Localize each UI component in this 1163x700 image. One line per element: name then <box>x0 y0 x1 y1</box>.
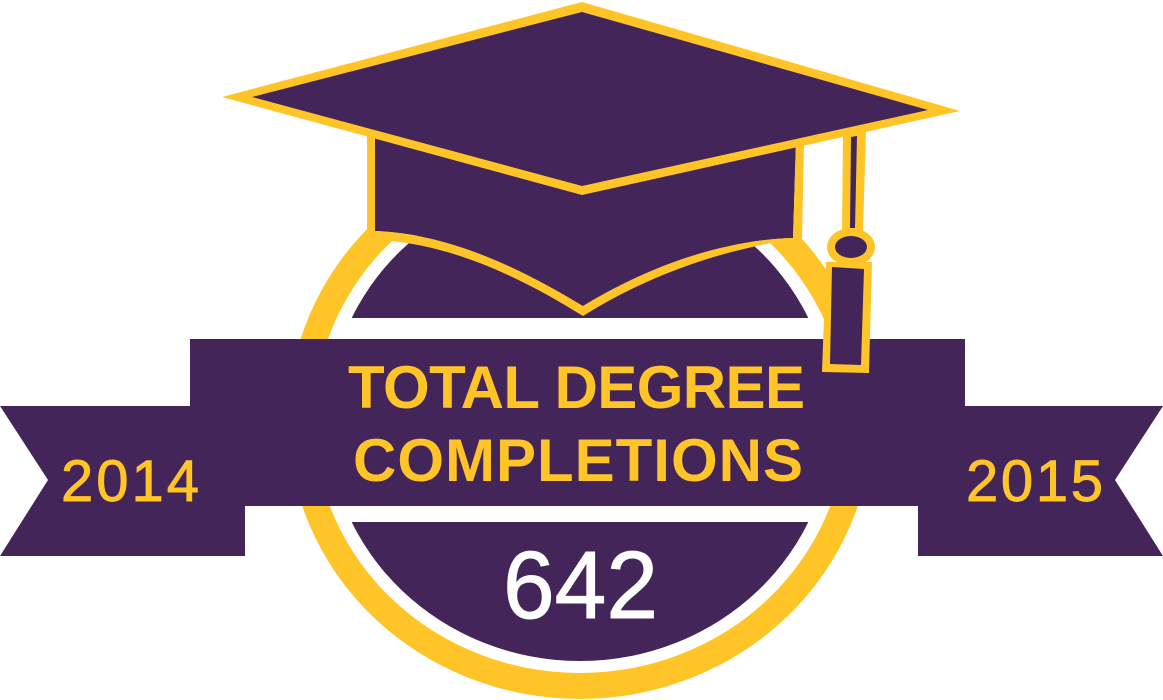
ribbon left tail <box>0 406 245 556</box>
tassel fringe <box>822 262 872 373</box>
lower purple circle segment <box>352 522 808 661</box>
total number: 642: 642 <box>503 532 658 639</box>
ribbon banner <box>0 339 1163 556</box>
year: 2014: 2014 <box>61 449 199 514</box>
gold ring around the badge <box>288 141 872 699</box>
heading: completions: COMPLETIONS <box>353 427 803 494</box>
tassel knot <box>827 228 875 266</box>
cap band gold outline <box>367 128 804 316</box>
ribbon centre band <box>190 339 965 506</box>
ribbon right tail <box>918 406 1163 556</box>
upper purple circle segment <box>352 236 808 318</box>
tassel <box>822 130 875 373</box>
year: 2015: 2015 <box>966 449 1103 514</box>
graduation cap <box>222 2 960 373</box>
heading: total degree: TOTAL DEGREE <box>348 354 805 421</box>
mortarboard top <box>222 2 960 195</box>
tassel cord <box>842 130 866 232</box>
cap band <box>367 125 796 306</box>
